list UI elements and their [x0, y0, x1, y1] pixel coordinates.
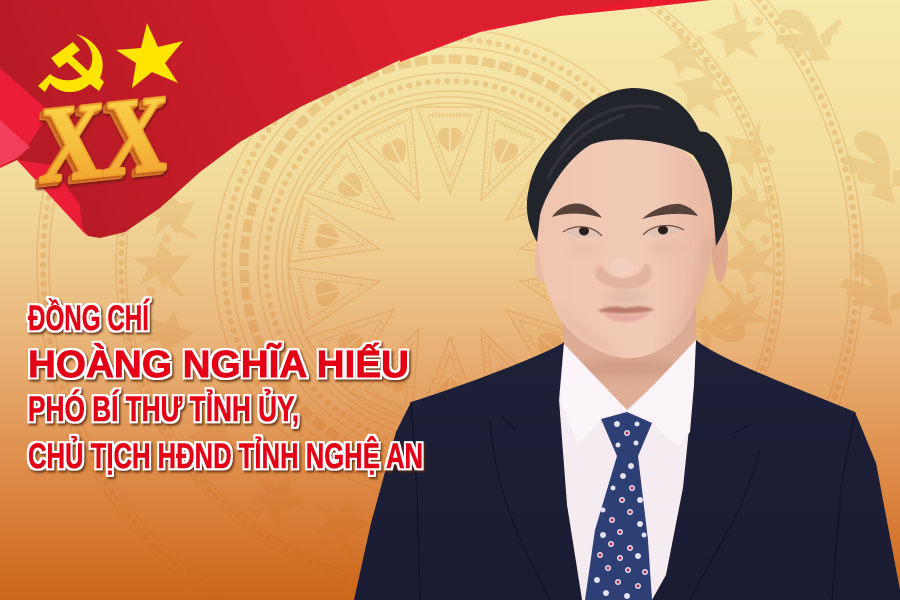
- title text block: [28, 298, 423, 476]
- flag main body: [0, 0, 640, 238]
- face: [537, 135, 716, 358]
- flag fold: [0, 68, 50, 168]
- shirt: [559, 340, 696, 600]
- shirt collar: [560, 344, 627, 444]
- hair highlights: [548, 106, 660, 178]
- nose: [595, 258, 652, 289]
- chin shadow: [578, 358, 678, 378]
- neck: [562, 300, 696, 410]
- jacket seams: [411, 402, 855, 600]
- icon: yellow star: [116, 23, 183, 88]
- eyes: [563, 226, 684, 237]
- line: CHỦ TỊCH HĐND TỈNH NGHỆ AN: CHỦ TỊCH HĐND TỈNH NGHỆ AN: [28, 436, 423, 476]
- drum figures: [130, 0, 785, 560]
- mouth: [597, 306, 655, 322]
- line: ĐỒNG CHÍ: ĐỒNG CHÍ: [28, 298, 150, 338]
- ears: [535, 238, 547, 282]
- icon: hammer and sickle: [38, 34, 104, 92]
- person portrait: [354, 88, 900, 600]
- tie pattern: [594, 421, 648, 599]
- necktie: [585, 412, 652, 600]
- suit jacket: [354, 342, 582, 600]
- face shading: [555, 235, 712, 356]
- drum birds: [181, 0, 900, 574]
- congress numeral XX: XX: [38, 72, 170, 206]
- flag ribbon bright top: [400, 0, 712, 62]
- red flag: [0, 0, 712, 238]
- line: HOÀNG NGHĨA HIẾU: HOÀNG NGHĨA HIẾU: [28, 342, 409, 386]
- hair: [527, 88, 732, 246]
- drum rays: [289, 107, 611, 423]
- line: PHÓ BÍ THƯ TỈNH ỦY: PHÓ BÍ THƯ TỈNH ỦY,: [28, 389, 299, 429]
- eyebrows: [552, 204, 698, 219]
